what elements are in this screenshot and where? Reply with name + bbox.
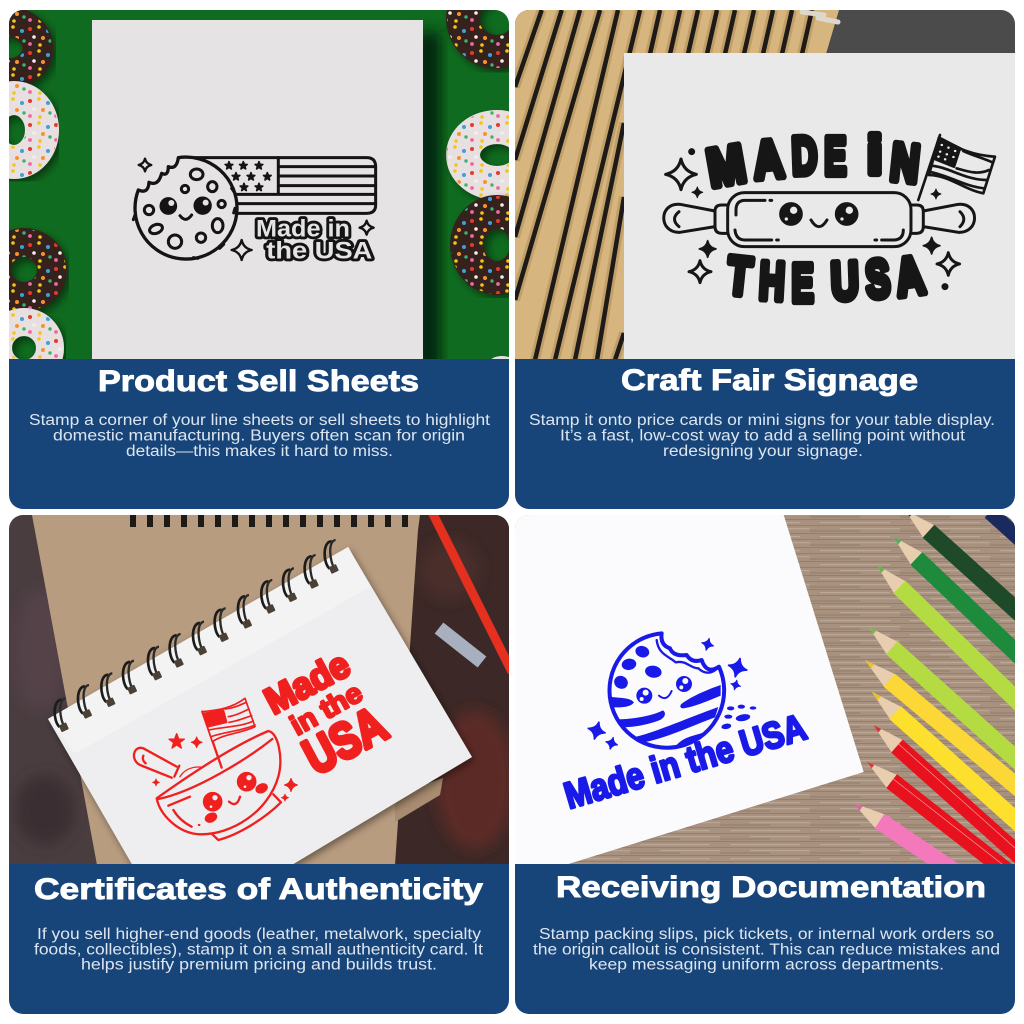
bowl: [157, 731, 281, 840]
MADE IN text: [704, 130, 922, 190]
THE USA text: U: [830, 251, 860, 311]
stamp: blue cookie flag: [559, 633, 811, 817]
THE USA text: A: [892, 245, 928, 308]
heading: Certificates of Authenticity: [34, 873, 483, 906]
notepad page: [48, 547, 472, 866]
pencil: yellow 2: [866, 685, 1024, 857]
caption band: [9, 359, 509, 509]
photo: spiral notepad on stone: [9, 512, 515, 866]
description: [34, 926, 484, 974]
stamp: cookie with flag: the USA: [266, 237, 372, 264]
stamp text: in the: [285, 677, 368, 741]
stamp text: Made in: [256, 215, 350, 242]
description: the origin callout is consistent. This can reduce mistakes and: [533, 941, 1000, 958]
description: details—this makes it hard to miss.: [126, 443, 393, 460]
panel: Craft Fair Signage: [515, 10, 1015, 509]
caption band: [9, 864, 509, 1014]
sparkles: [666, 150, 960, 289]
stone texture: [15, 515, 515, 865]
pencil: pink: [848, 796, 1024, 944]
THE USA text: E: [792, 255, 814, 314]
description: keep messaging uniform across departments.: [589, 957, 944, 974]
pencil: red: [868, 719, 1024, 890]
THE USA text: T: [724, 245, 755, 307]
sparkles: [586, 637, 749, 751]
donut: white right: [463, 127, 531, 183]
MADE IN text: A: [751, 130, 786, 191]
photo: bamboo mat and paper card: [515, 10, 1015, 360]
THE USA text: S: [864, 248, 892, 310]
heading: Product Sell Sheets: [98, 365, 419, 398]
panel: Product Sell Sheets: [0, 0, 531, 509]
MADE IN text: E: [824, 127, 846, 186]
THE USA text: H: [758, 250, 786, 312]
stamp: cookie with flag: [133, 157, 376, 264]
paper sheet: [92, 20, 423, 360]
description: helps justify premium pricing and builds trust.: [81, 957, 437, 974]
description: Stamp packing slips, pick tickets, or internal work orders so: [539, 926, 994, 943]
donut: chocolate top left: [0, 22, 38, 74]
paper sheet: [515, 515, 864, 866]
panel: Certificates of Authenticity: [9, 512, 515, 1014]
caption band: [515, 359, 1015, 509]
description: Stamp a corner of your line sheets or sell sheets to highlight: [29, 412, 491, 429]
string binding: [802, 12, 838, 22]
bamboo mat: [515, 10, 839, 360]
paper card: [624, 53, 1015, 360]
colored pencils: [848, 504, 1024, 944]
flag: [202, 698, 255, 768]
stamp text: Made in the USA: [559, 705, 811, 817]
pencil: green: [887, 530, 1024, 707]
photo: donuts on green with paper sheet: [9, 10, 509, 359]
pencil: lime: [871, 559, 1024, 737]
pencil: lime 2: [863, 620, 1024, 792]
paper shadow: [416, 32, 440, 372]
MADE IN text: D: [791, 125, 818, 186]
pencil: red 2: [861, 755, 1024, 915]
caption band: [515, 864, 1015, 1014]
flag: [178, 158, 376, 213]
donut: chocolate right: [467, 212, 527, 278]
donut: white bottom right tip: [492, 356, 509, 359]
spiral binding: [48, 540, 370, 754]
stamp text: [257, 643, 396, 785]
cookie: [133, 157, 237, 259]
cookie: [608, 633, 756, 748]
description: It’s a fast, low-cost way to add a selling point without: [560, 428, 966, 444]
donut: white left: [0, 98, 42, 162]
description: Stamp it onto price cards or mini signs for your table display.: [529, 412, 995, 429]
heading: Receiving Documentation: [556, 871, 986, 904]
description: [529, 412, 995, 460]
donut: white bottom left: [0, 322, 50, 374]
description: [533, 926, 1000, 974]
pen cap: [439, 628, 482, 662]
THE USA text: [726, 252, 928, 306]
whisk: [134, 748, 218, 787]
pencil: dark green: [899, 504, 1024, 676]
rolling pin: [664, 193, 975, 247]
stamp text: Made: [257, 643, 357, 722]
MADE IN text: M: [703, 134, 750, 199]
MADE IN text: N: [888, 132, 922, 194]
panel: Receiving Documentation: [515, 504, 1024, 1014]
stamp: mixing bowl: [134, 643, 396, 840]
red pen: [432, 512, 512, 672]
back spiral: [133, 515, 405, 527]
photo: paper and colored pencils on wood: [515, 504, 1024, 944]
description: [30, 414, 490, 456]
pencil: navy: [985, 506, 1024, 567]
donut: chocolate lower left: [0, 243, 52, 297]
stamp text: USA: [294, 695, 396, 785]
sparkles: [139, 159, 374, 260]
MADE IN text: i: [867, 127, 882, 186]
flag: [918, 135, 995, 200]
heading: Craft Fair Signage: [621, 364, 918, 397]
pencil: yellow: [859, 653, 1024, 819]
stamp: rolling pin: [664, 125, 995, 314]
description: redesigning your signage.: [663, 443, 863, 460]
kraft notebook: [32, 515, 420, 865]
stars: [152, 734, 297, 801]
description: foods, collectibles), stamp it on a small authenticity card. It: [34, 941, 484, 958]
description: domestic manufacturing. Buyers often scan for origin: [53, 428, 465, 444]
donut: chocolate top right: [463, 0, 531, 52]
description: If you sell higher-end goods (leather, metalwork, specialty: [37, 926, 481, 943]
